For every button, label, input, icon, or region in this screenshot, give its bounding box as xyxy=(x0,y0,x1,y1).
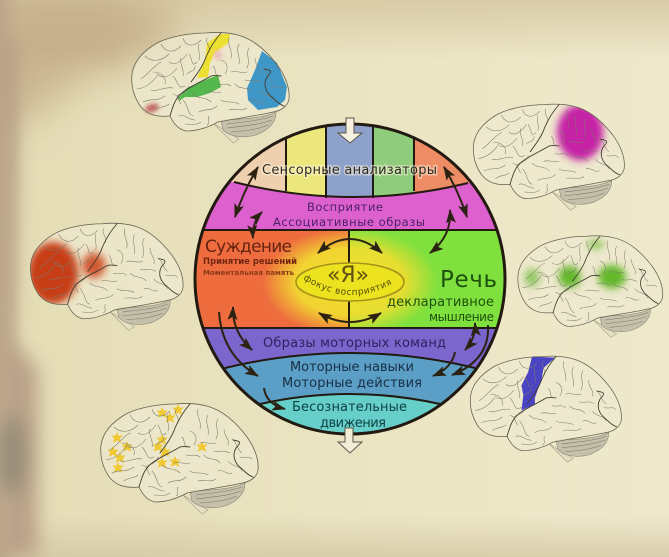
arrow: output below xyxy=(338,428,362,453)
label: perception: Восприятие xyxy=(307,200,383,214)
arrows between levels xyxy=(219,167,488,409)
heading: judgement: Суждение xyxy=(205,237,292,257)
patch: red frontal glow xyxy=(28,242,105,304)
label: decision making: Принятие решений xyxy=(203,256,297,266)
label: declarative: декларативное xyxy=(387,295,494,310)
patch: blue area xyxy=(247,51,287,110)
label: thinking: мышление xyxy=(429,310,494,324)
brain: sensory analyzers (yellow, green, blue areas) xyxy=(132,32,289,143)
brain: perception (magenta parietal area) xyxy=(473,104,624,210)
patch: green glows xyxy=(525,240,626,289)
label: focus of perception: фокус восприятия xyxy=(304,275,392,296)
brain: speech (green spots) xyxy=(518,236,663,337)
label: self: «Я» xyxy=(327,263,369,288)
label: unconscious: Бесознательные xyxy=(292,400,407,415)
label: motor skills: Моторные навыки xyxy=(290,360,414,375)
patch: pink spot xyxy=(214,50,222,60)
ellipse: self, focus of perception xyxy=(295,262,405,302)
patch: green area xyxy=(178,75,221,101)
patch: magenta glow xyxy=(557,105,603,160)
heading: speech: Речь xyxy=(440,267,497,293)
central sphere diagram xyxy=(194,118,506,454)
arrow: input from above xyxy=(338,118,362,143)
brain: motor images (blue-violet strip) xyxy=(470,356,621,462)
brain: working memory (yellow stars) xyxy=(101,403,258,514)
label: working memory: Моментальная память xyxy=(203,269,295,277)
label: associative images: Ассоциативные образы xyxy=(273,215,425,229)
brain: judgement (red frontal area) xyxy=(28,223,183,330)
label: movements: движения xyxy=(320,416,386,431)
patch: violet strip xyxy=(521,357,555,410)
label: motor actions: Моторные действия xyxy=(282,376,422,391)
label: sensory analyzers: Сенсорные анализаторы xyxy=(262,163,437,178)
coloured bands xyxy=(195,124,505,434)
patch: red area xyxy=(144,102,160,114)
patch: yellow star spots xyxy=(107,404,208,473)
patch: yellow area xyxy=(197,34,230,78)
label: motor command images: Образы моторных команд xyxy=(263,336,446,351)
